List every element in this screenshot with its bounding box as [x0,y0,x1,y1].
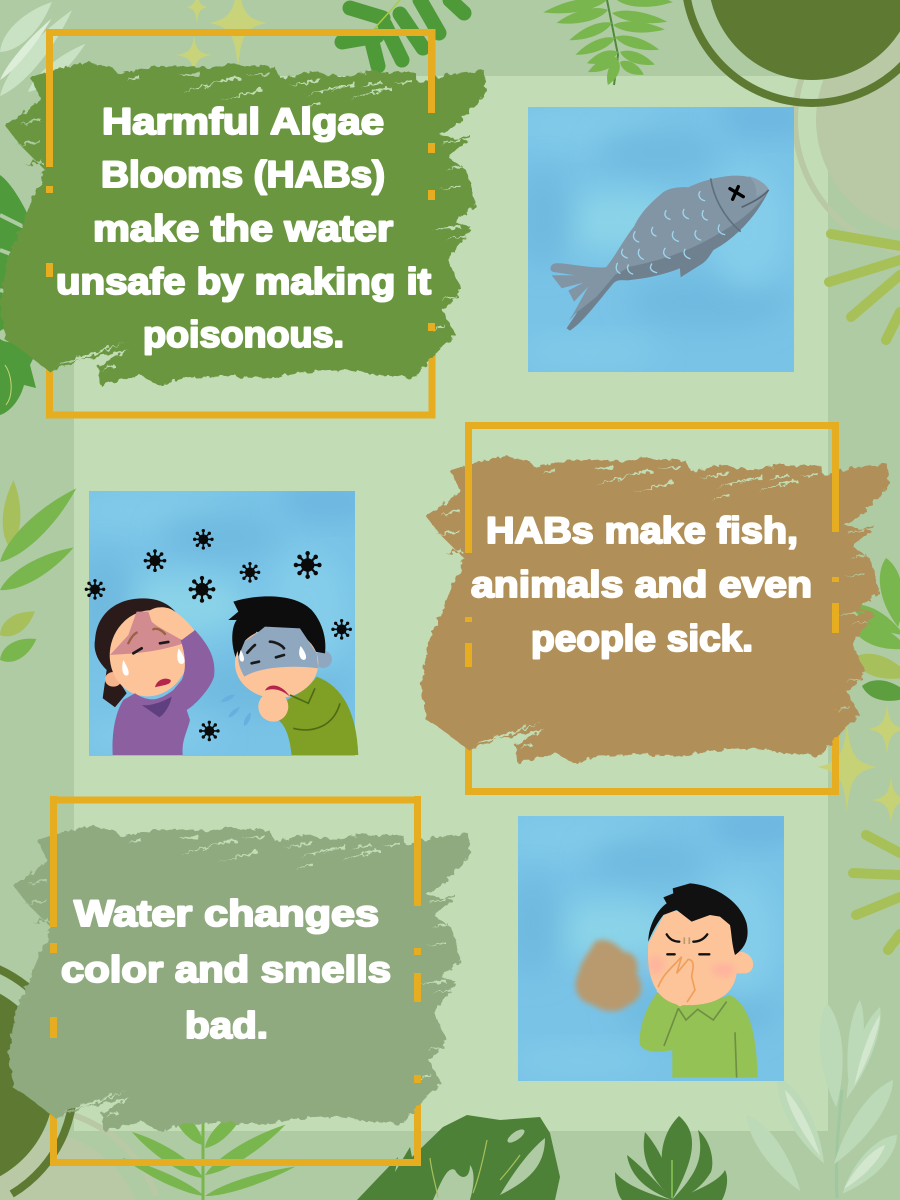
text: harmful algae blooms: Blooms (HABs) [101,154,385,195]
brush stroke: sage [8,826,470,1132]
text: harmful algae blooms: poisonous. [143,314,344,355]
icon: man pinching nose [575,883,758,1078]
decoration: bottom monstera leaf left [357,1115,560,1200]
decoration: mimosa leaves [342,0,464,66]
text: harmful algae blooms [56,101,431,355]
decoration: left monstera leaf [0,175,50,415]
text: make people sick [471,510,812,659]
decoration: left mid leaves [0,480,83,668]
inner panel [74,76,828,1131]
yellow frame 3 [54,800,418,1162]
decoration: mid-right leaves [848,556,900,706]
text: make people sick: animals and even [471,564,812,605]
brush stroke: tan [421,456,889,764]
text: harmful algae blooms: make the water [93,208,393,249]
decoration: top stars [176,0,266,74]
text: make people sick: people sick. [531,618,753,659]
decoration: lower-right olive fronds [853,835,900,950]
decoration: top-right circles [685,0,900,255]
yellow frame 2 [468,426,836,792]
yellow frame 1 [50,32,432,415]
decoration: top-left watercolor leaves [0,0,90,102]
image panel: bad smell [498,806,808,1081]
text: water changes: bad. [185,1005,268,1046]
text: water changes: Water changes [74,893,379,934]
decoration: bottom fern [120,1098,297,1200]
decoration: bottom-left circles [0,958,157,1200]
decoration: top fern [542,0,673,87]
decoration: right stars [817,704,900,824]
text: make people sick: HABs make fish, [486,510,798,551]
text: water changes [61,893,391,1046]
text: harmful algae blooms: Harmful Algae [102,101,384,142]
decoration: bottom monstera leaf right [615,1116,727,1200]
text: water changes: color and smells [61,949,391,990]
image panel: dead fish [508,97,818,372]
brush stroke: green [0,62,486,386]
icon: dead fish [550,176,769,331]
text: harmful algae blooms: unsafe by making it [56,261,431,302]
image panel: sick people [69,481,379,756]
decoration: bottom-right watercolor leaves [739,999,900,1200]
icon: sick woman and man [85,529,358,755]
decoration: upper-right olive fronds [829,234,900,340]
frame segments above brush strokes [46,29,839,1083]
